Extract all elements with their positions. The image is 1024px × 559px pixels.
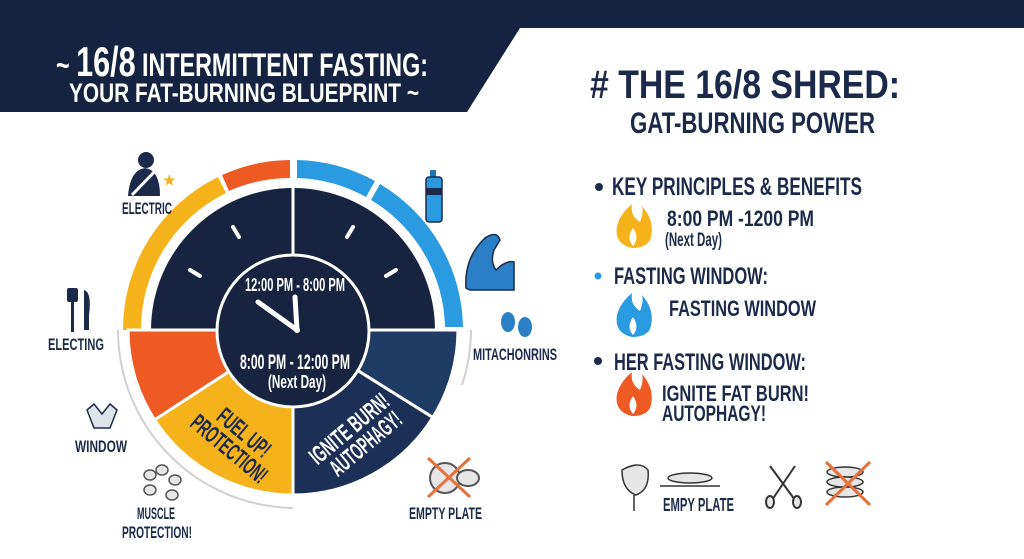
icon: crossed plate + label EMPTY PLATE (409, 458, 482, 523)
icon: orange flame (617, 372, 652, 416)
icon: molecule + label muscle protection: PROTECTION! (122, 523, 192, 542)
icon: water bottle (426, 170, 442, 222)
header banner (0, 0, 1024, 112)
icon: spatula (622, 465, 648, 511)
icon: window + label: WINDOW (75, 437, 128, 456)
segment label: ignite burn: AUTOPHAGY! (324, 406, 408, 482)
item 3: her fasting window (594, 349, 809, 426)
item 3: her fasting window: IGNITE FAT BURN! (662, 381, 809, 406)
icon: person + label ELECTRIC (122, 152, 176, 218)
title: ~ 16/8 INTERMITTENT FASTING: (56, 38, 428, 85)
segment label: ignite burn (304, 388, 409, 487)
item 2: fasting window (594, 263, 816, 337)
segment label: fuel up: FUEL UP! (211, 403, 276, 463)
icon: window + label (75, 404, 128, 456)
right heading (590, 63, 900, 140)
center dial: 8:00 PM - 12:00 PM (240, 351, 350, 374)
icon: molecule + label muscle protection: MUSCLE (137, 504, 175, 523)
center dial: 12:00 PM - 8:00 PM (245, 275, 345, 295)
icon: person + label ELECTRIC: ELECTRIC (122, 199, 172, 218)
icon: person + label ELECTRIC: ★ (163, 172, 176, 188)
right heading: # THE 16/8 SHRED: (590, 63, 900, 107)
item 2: fasting window: FASTING WINDOW (669, 296, 816, 321)
ticks (190, 227, 396, 276)
icon: molecule + label muscle protection (122, 465, 192, 542)
item 3: her fasting window: AUTOPHAGY! (662, 401, 766, 426)
icon: yellow flame (617, 204, 652, 248)
icon: blue flame (617, 293, 652, 337)
icon: flexed arm (466, 234, 514, 290)
bottom segments (128, 330, 293, 420)
item 1: key principles (595, 173, 862, 251)
icon: fork knife + label ELECTING: ELECTING (48, 335, 104, 354)
right heading: GAT-BURNING POWER (630, 107, 875, 140)
item 3: her fasting window: HER FASTING WINDOW: (614, 349, 806, 376)
icon: fork knife + label ELECTING (48, 288, 104, 354)
title (56, 38, 428, 108)
icon: crossed plate + label EMPTY PLATE: EMPTY PLATE (409, 504, 482, 523)
icon: kidneys + label MITACHONRINS (473, 312, 557, 364)
item 2: fasting window: FASTING WINDOW: (614, 263, 768, 290)
title: YOUR FAT-BURNING BLUEPRINT ~ (69, 78, 419, 108)
segment label: fuel up: PROTECTION! (185, 409, 273, 489)
item 1: key principles: KEY PRINCIPLES & BENEFITS (612, 173, 862, 201)
center dial (217, 255, 369, 407)
item 1: key principles: 8:00 PM -1200 PM (667, 206, 814, 231)
icon: crossed utensils (766, 466, 801, 508)
icon: kidneys + label MITACHONRINS: MITACHONRINS (473, 345, 557, 364)
center dial: (Next Day) (268, 372, 326, 392)
segment label: ignite burn: IGNITE BURN! (304, 388, 395, 470)
item 1: key principles: (Next Day) (665, 230, 722, 251)
outer ring segments (123, 177, 226, 330)
segment label: fuel up (185, 393, 287, 489)
clock wheel (118, 160, 471, 508)
icon: crossed plate (826, 462, 870, 505)
icon: plate (660, 473, 720, 486)
label: empy plate: EMPY PLATE (663, 495, 734, 515)
top dark half (151, 188, 435, 330)
bottom icon row (622, 462, 870, 515)
